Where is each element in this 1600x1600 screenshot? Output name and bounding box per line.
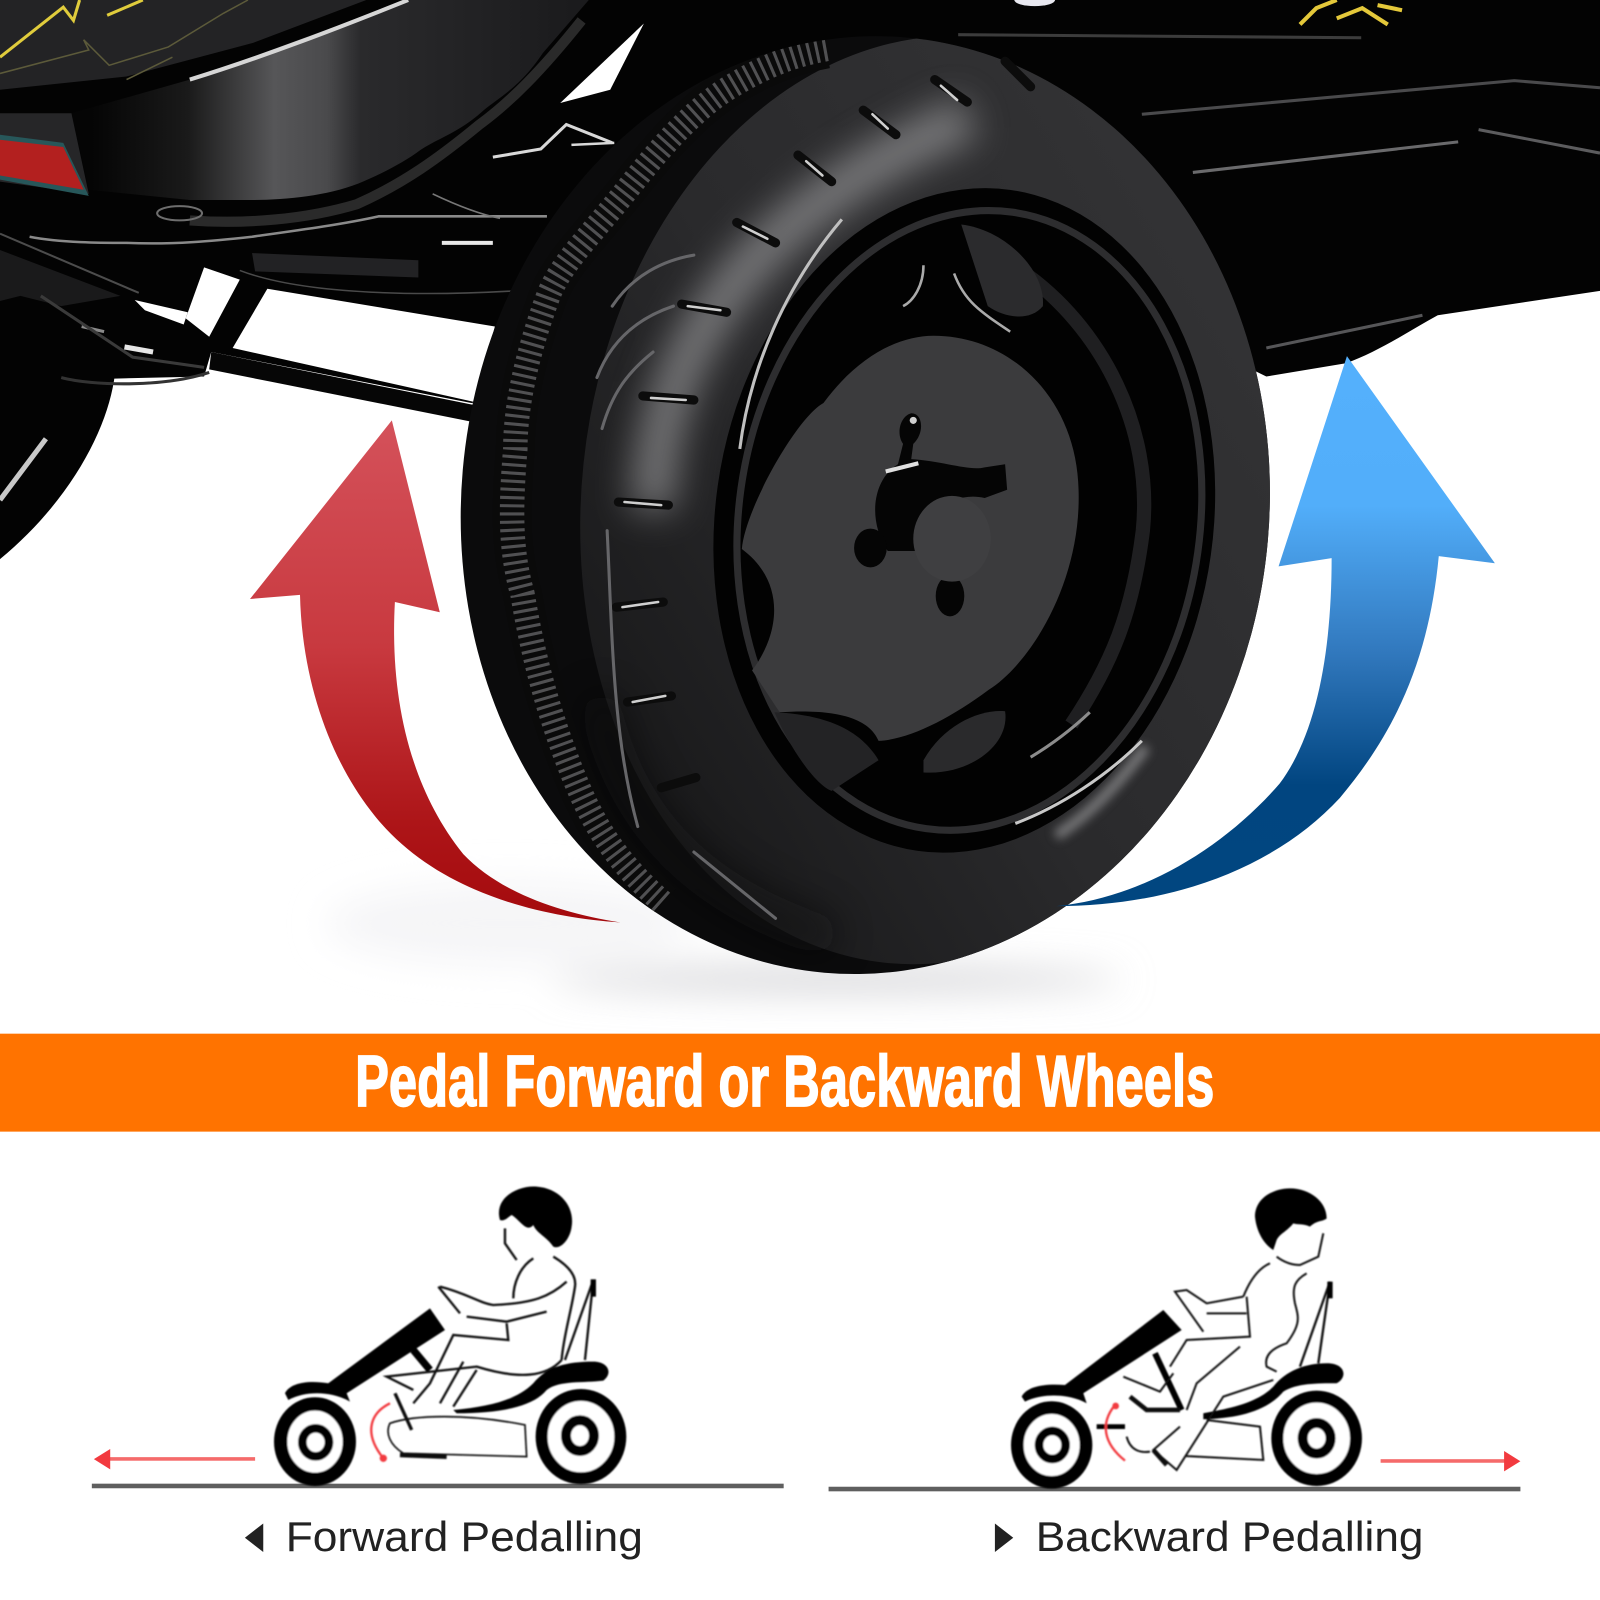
hub disc: [742, 336, 1079, 741]
front fender and bar: [285, 1308, 445, 1402]
seat top panel: [0, 0, 366, 90]
rim ring: [698, 180, 1241, 861]
caption: forward pedalling: [245, 1513, 643, 1560]
photo: go-kart body and chassis: [0, 0, 1600, 559]
front fender and bar: [1022, 1310, 1182, 1403]
red pedal motion arc: [1106, 1405, 1125, 1461]
white gap behind wheel: [560, 23, 644, 103]
pedal crank: [1097, 1420, 1125, 1434]
forward label: Forward Pedalling: [286, 1513, 643, 1560]
hair: [1255, 1188, 1327, 1250]
kid on kart: [281, 1187, 620, 1479]
rear wheel: [1277, 1397, 1356, 1480]
yellow decal on body: [1300, 0, 1402, 24]
chassis plate: [252, 253, 418, 278]
spoke lobes: [774, 224, 1043, 791]
tyre silhouette: [422, 2, 1309, 1008]
ground line: [92, 1484, 784, 1488]
hair: [499, 1187, 572, 1247]
emblem: [1014, 0, 1055, 6]
body outlines: [1123, 1233, 1323, 1470]
body lines on right: [958, 35, 1600, 348]
steering strut: [413, 1350, 430, 1370]
direction arrow: [94, 1449, 255, 1469]
seat bolt: [157, 206, 202, 220]
rim highlight: [740, 219, 842, 449]
tread marks: [597, 61, 1031, 918]
rim: [671, 155, 1257, 885]
seat edge highlight: [190, 0, 408, 80]
seat: [453, 1362, 608, 1413]
diagram: forward pedalling: [92, 1187, 784, 1488]
lower right gloss: [1056, 747, 1146, 836]
red curved arrow: [250, 420, 620, 922]
banner title: Pedal Forward or Backward Wheels: [355, 1041, 1214, 1122]
seat side panel: [71, 0, 589, 200]
chassis dark silhouette: [0, 0, 1600, 559]
front wheel: [1017, 1408, 1086, 1482]
ground line: [829, 1487, 1520, 1491]
reflector: [0, 113, 89, 194]
pedal rod: [209, 352, 480, 422]
rim lower gloss: [1015, 741, 1142, 823]
rear left wheel spoke highlight: [0, 439, 46, 500]
rear wheel: [542, 1395, 620, 1478]
centre cap: [913, 496, 991, 582]
kid on kart: [1017, 1188, 1356, 1482]
lower tyre shade: [602, 714, 816, 934]
tyre gloss: [653, 117, 969, 510]
seat back: [1300, 1282, 1330, 1367]
chassis highlights: [240, 124, 614, 293]
white gap under seat: [186, 267, 240, 337]
left triangle: [245, 1523, 263, 1552]
pedal: [41, 296, 209, 384]
seat back: [565, 1280, 593, 1360]
frame lower line: [30, 216, 547, 243]
white gap between strut and rod: [233, 289, 495, 402]
direction arrow: [1381, 1451, 1520, 1471]
inner ring arc: [1020, 270, 1144, 724]
white strip by pedal: [135, 300, 188, 324]
blue curved arrow: [1056, 356, 1495, 906]
seat: [1203, 1363, 1343, 1419]
diagram: backward pedalling: [829, 1188, 1520, 1491]
lower left bolt: [854, 529, 887, 567]
ground shadow: [327, 883, 1122, 992]
orange banner: [0, 1034, 1600, 1132]
caption: backward pedalling: [995, 1513, 1423, 1560]
lower left plate: [0, 250, 120, 306]
backward label: Backward Pedalling: [1036, 1513, 1423, 1560]
yellow decal on seat: [0, 0, 248, 80]
right triangle: [995, 1523, 1013, 1552]
hub centre: [854, 413, 1007, 616]
tyre sidewall: [500, 38, 1270, 964]
lower bolt: [936, 576, 964, 616]
bolt star: [875, 413, 1007, 551]
tread band: [608, 65, 830, 912]
seat frame: [190, 20, 582, 222]
steering strut: [1155, 1353, 1182, 1410]
body outlines: [387, 1228, 575, 1457]
wheel: [460, 36, 1270, 974]
front wheel: [281, 1404, 349, 1479]
red pedal motion arc: [371, 1403, 390, 1458]
